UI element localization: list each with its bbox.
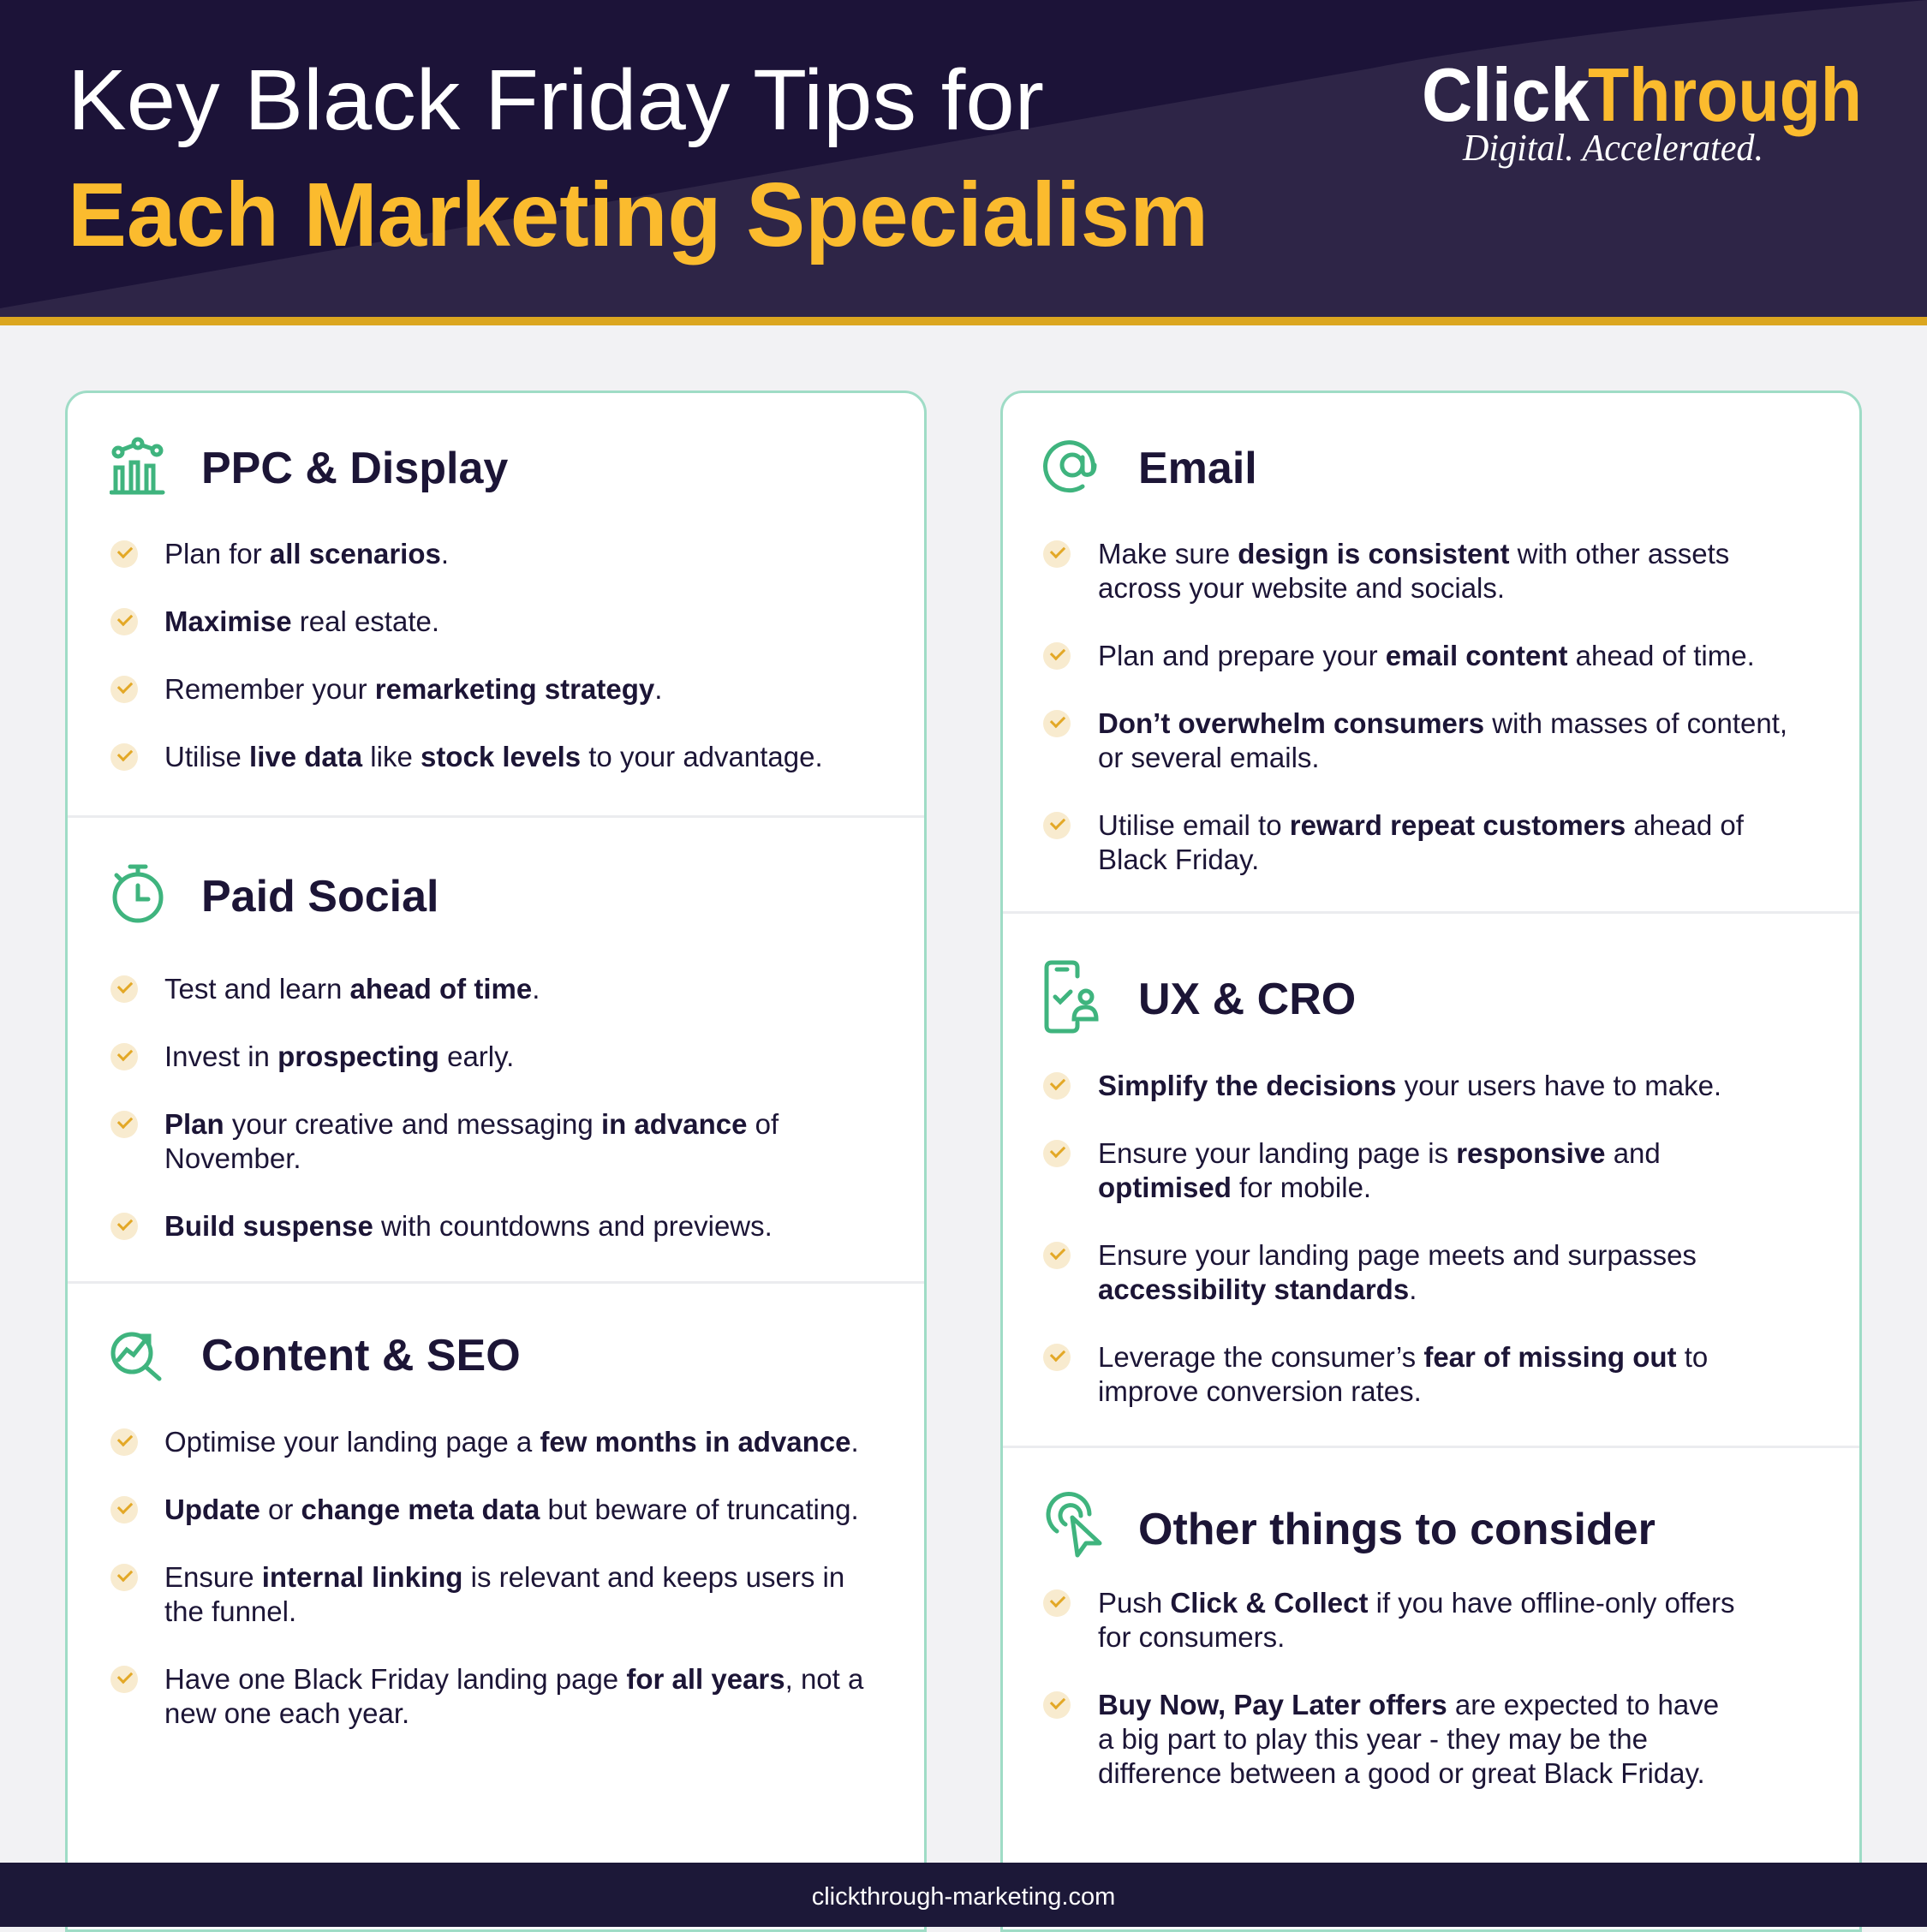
list: Content & SEO: Optimise your landing page a few months in advance. <box>164 1426 859 1458</box>
heading: PPC: PPC & Display <box>201 444 508 493</box>
list: Email <box>1043 538 1787 875</box>
list: UX & CRO <box>1043 1070 1721 1407</box>
list: UX & CRO: Simplify the decisions your users have to make. <box>1098 1070 1721 1101</box>
list: Other: a big part to play this year - they may be the <box>1098 1723 1648 1755</box>
heading: Other things: Other things to consider <box>1138 1505 1656 1554</box>
list: Email: Make sure design is consistent with other assets <box>1098 538 1729 569</box>
text: new one each year. <box>164 1697 409 1729</box>
heading: Email: Email <box>1138 444 1257 493</box>
header <box>0 0 1927 325</box>
text: Black Friday. <box>1098 844 1259 875</box>
list: Content & SEO: Have one Black Friday landing page for all years, not a <box>164 1663 863 1695</box>
logo: Digital. Accelerated. <box>1462 127 1763 169</box>
list: UX & CRO: optimised for mobile. <box>1098 1172 1371 1203</box>
list: Other <box>1043 1587 1735 1789</box>
list: PPC: Maximise real estate. <box>164 605 439 637</box>
list: Other: for consumers. <box>1098 1621 1285 1653</box>
list: Content & SEO: the funnel. <box>164 1595 296 1627</box>
footer: clickthrough-marketing.com <box>812 1883 1115 1911</box>
logo: Through <box>1588 52 1862 137</box>
icon: search growth <box>111 1333 161 1380</box>
heading: UX & CRO: UX & CRO <box>1138 975 1356 1024</box>
list: Paid Social: November. <box>164 1142 301 1174</box>
list: UX & CRO: Ensure your landing page meets and surpasses <box>1098 1239 1697 1271</box>
panel: left <box>65 391 927 1932</box>
list: Content & SEO: Update or change meta data but beware of truncating. <box>164 1494 859 1525</box>
icon: cursor click <box>1047 1492 1101 1557</box>
list: Paid Social: Test and learn ahead of time. <box>164 973 540 1005</box>
list: Other: Push Click & Collect if you have offline-only offers <box>1098 1587 1735 1619</box>
panel: right <box>1000 391 1862 1932</box>
list: Email: or several emails. <box>1098 742 1320 773</box>
icon: bar chart <box>110 437 164 495</box>
text: improve conversion rates. <box>1098 1375 1422 1407</box>
icon: phone user <box>1045 961 1098 1033</box>
title: Each Marketing Specialism <box>68 164 1208 265</box>
list: PPC: Remember your remarketing strategy. <box>164 673 662 705</box>
list: Paid Social: Plan your creative and messaging in advance of <box>164 1108 779 1140</box>
list: Email: Utilise email to reward repeat customers ahead of <box>1098 809 1744 841</box>
list: Email: Don’t overwhelm consumers with masses of content, <box>1098 707 1787 739</box>
icon: stopwatch <box>113 865 163 923</box>
footer <box>0 1863 1927 1927</box>
heading: Paid Social: Paid Social <box>201 872 438 921</box>
title: Key Black Friday Tips for <box>68 52 1044 148</box>
list: Paid Social: Build suspense with countdowns and previews. <box>164 1210 773 1242</box>
logo <box>1422 52 1862 169</box>
list: Email: across your website and socials. <box>1098 572 1505 604</box>
title <box>68 52 1208 265</box>
list: PPC: Plan for all scenarios. <box>164 538 449 569</box>
list: Other: difference between a good or great Black Friday. <box>1098 1757 1705 1789</box>
logo: Click <box>1422 52 1590 137</box>
list: Email: Plan and prepare your email content ahead of time. <box>1098 640 1755 671</box>
list: Content & SEO <box>110 1426 863 1729</box>
list: Paid Social: Invest in prospecting early. <box>164 1041 514 1072</box>
list: Paid Social <box>110 973 779 1242</box>
list: Other: Buy Now, Pay Later offers are expected to have <box>1098 1689 1719 1720</box>
list: UX & CRO: accessibility standards. <box>1098 1273 1417 1305</box>
icon: at sign <box>1043 440 1096 493</box>
list: PPC <box>110 538 823 772</box>
heading: Content & SEO: Content & SEO <box>201 1331 521 1380</box>
list: Content & SEO: Ensure internal linking is relevant and keeps users in <box>164 1561 844 1593</box>
list: PPC: Utilise live data like stock levels to your advantage. <box>164 741 823 772</box>
list: UX & CRO: Ensure your landing page is responsive and <box>1098 1137 1661 1169</box>
list: UX & CRO: Leverage the consumer’s fear of missing out to <box>1098 1341 1708 1373</box>
